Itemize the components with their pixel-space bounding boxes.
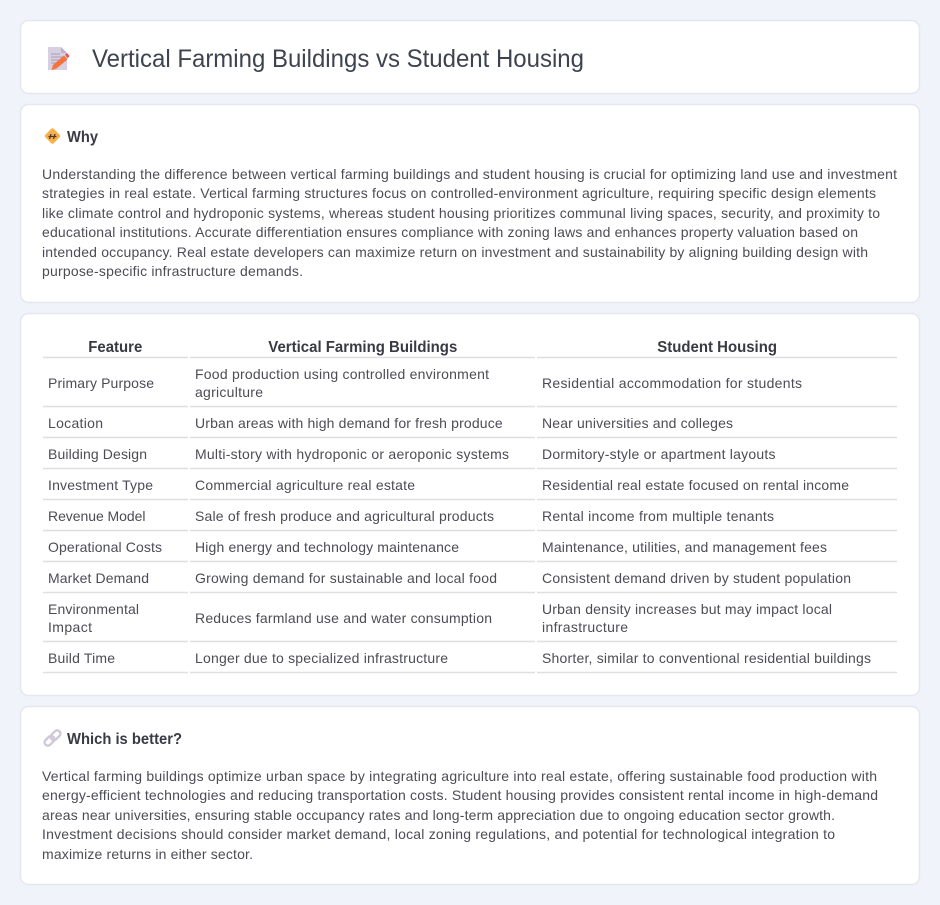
text block: which is better paragraph	[42, 768, 878, 862]
table rows: Market Demand	[48, 570, 149, 586]
table rows: Investment Type	[48, 477, 153, 493]
heading: why: Why	[67, 129, 98, 146]
table rows: Residential real estate focused on rental income	[542, 477, 849, 493]
table rows: Build Time	[48, 650, 115, 666]
table rows: Residential accommodation for students	[542, 375, 802, 391]
text block: why paragraph: like climate control and hydroponic systems, whereas student housing prioritizes communal living spaces, security, and proximity to	[42, 205, 880, 221]
text block: which is better paragraph: Vertical farming buildings optimize urban space by integrating agriculture into real estate, offering sustainable food production with	[42, 768, 877, 784]
table rows: Urban density increases but may impact local	[542, 601, 832, 617]
table rows: Longer due to specialized infrastructure	[195, 650, 448, 666]
table rows: Growing demand for sustainable and local food	[195, 570, 497, 586]
panel: comparison table	[20, 314, 920, 696]
table rows	[48, 366, 871, 666]
text block: why paragraph: strategies in real estate. Vertical farming structures focus on controlled-environment agriculture, requiring specific design elements	[42, 185, 876, 201]
table rows: Reduces farmland use and water consumption	[195, 610, 492, 626]
table rows: Rental income from multiple tenants	[542, 508, 774, 524]
icon: document with pencil	[48, 47, 70, 70]
text block: which is better paragraph: Investment decisions should consider market demand, local zoning regulations, and potential for technological integration to	[42, 826, 835, 842]
table rows: Revenue Model	[48, 508, 146, 524]
table rows: Location	[48, 415, 103, 431]
panel: why	[20, 104, 920, 302]
text block: why paragraph: purpose-specific infrastructure demands.	[42, 263, 303, 279]
table rows: Near universities and colleges	[542, 415, 733, 431]
text block: which is better paragraph: energy-efficient technologies and reducing transportation costs. Student housing provides consistent rental income in high-demand	[42, 787, 878, 803]
table rows: Dormitory-style or apartment layouts	[542, 446, 776, 462]
heading: which is better: Which is better?	[67, 731, 182, 748]
table rows: Environmental	[48, 601, 139, 617]
table header: Feature	[88, 339, 142, 356]
text block: why paragraph: Understanding the difference between vertical farming buildings and student housing is crucial for optimizing land use and investment	[42, 166, 897, 182]
text block: which is better paragraph: maximize returns in either sector.	[42, 846, 253, 862]
icon: diamond sign	[44, 128, 61, 144]
table rows: Sale of fresh produce and agricultural products	[195, 508, 494, 524]
table rows: Multi-story with hydroponic or aeroponic systems	[195, 446, 509, 462]
table rows: High energy and technology maintenance	[195, 539, 459, 555]
text block: which is better paragraph: areas near universities, ensuring stable occupancy rates and long-term appreciation due to ongoing education sector growth.	[42, 807, 835, 823]
table header: Student Housing	[657, 339, 777, 356]
table header	[88, 339, 777, 356]
table rows: Consistent demand driven by student population	[542, 570, 851, 586]
panel: which is better	[20, 706, 920, 884]
table rows: Primary Purpose	[48, 375, 154, 391]
table rows: Commercial agriculture real estate	[195, 477, 415, 493]
text block: why paragraph: educational institutions. Accurate differentiation ensures compliance with zoning laws and enhances property valuation based on	[42, 224, 858, 240]
text block: why paragraph	[42, 166, 897, 279]
table header: Vertical Farming Buildings	[268, 339, 457, 356]
title: Vertical Farming Buildings vs Student Housing	[92, 45, 584, 73]
table rows: agriculture	[195, 384, 263, 400]
table rows: Impact	[48, 619, 92, 635]
icon: chain link	[43, 729, 62, 747]
table rows: Food production using controlled environment	[195, 366, 489, 382]
text block: why paragraph: intended occupancy. Real estate developers can maximize return on investment and sustainability by aligning building design with	[42, 244, 868, 260]
table rows: Building Design	[48, 446, 147, 462]
table rows: Maintenance, utilities, and management fees	[542, 539, 827, 555]
panel: title card	[20, 20, 920, 94]
table rows: Urban areas with high demand for fresh produce	[195, 415, 503, 431]
table rows: infrastructure	[542, 619, 628, 635]
table rows: Operational Costs	[48, 539, 162, 555]
table rows: Shorter, similar to conventional residential buildings	[542, 650, 871, 666]
